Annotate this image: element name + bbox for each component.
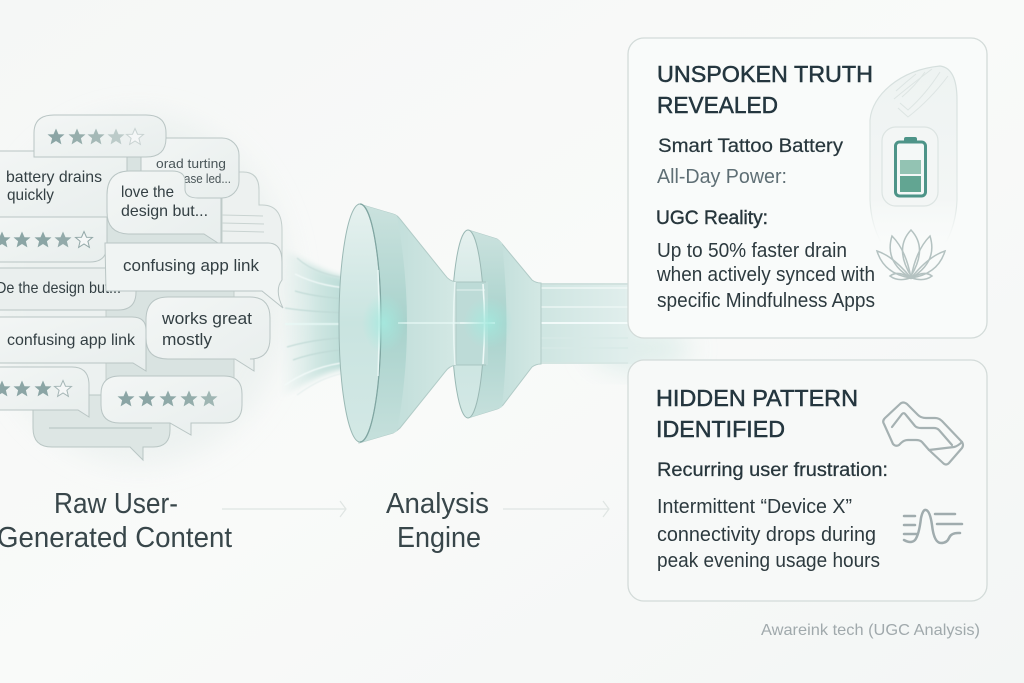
card body text: specific Mindfulness Apps <box>657 290 875 312</box>
icon: second funnel lens <box>452 230 541 418</box>
card heading: UNSPOKEN TRUTH <box>657 61 873 87</box>
card body text <box>657 496 880 572</box>
heading: analysis engine <box>386 488 489 554</box>
bubble: works great mostly <box>146 297 270 371</box>
bubble: works great mostly: mostly <box>162 330 212 349</box>
bubble: blank lined <box>222 172 282 260</box>
output stream to the cards <box>505 283 690 371</box>
bubble: confusing app link left <box>0 317 146 371</box>
icon: signal wave <box>904 510 962 543</box>
card heading <box>657 61 873 118</box>
card subheading: recurring frustration: Recurring user frustration: <box>657 460 888 481</box>
bubble: three stars <box>0 367 89 417</box>
arrow: content to engine <box>222 501 346 517</box>
icon: flexible band <box>883 402 963 464</box>
card body text: when actively synced with <box>656 264 875 286</box>
icon: lotus <box>877 230 945 280</box>
card body text: Intermittent “Device X” <box>657 496 852 518</box>
bubble: confusing app link right: confusing app link <box>123 256 259 275</box>
bubble: three and a half stars <box>0 217 107 262</box>
panel: raw user-generated content bubbles <box>0 115 290 465</box>
footer credit: Awareink tech (UGC Analysis) <box>761 622 980 639</box>
bubble: battery drains quickly: battery drains <box>6 169 102 186</box>
bubble: battery drains quickly: quickly <box>7 187 54 204</box>
bubble: truncated review: ase led... <box>184 171 231 186</box>
card text: all-day power: All-Day Power: <box>657 166 787 188</box>
bubble: confusing app link left: confusing app link <box>7 332 136 349</box>
bubble: truncated review: orad turting <box>156 156 226 171</box>
bubble: battery drains quickly <box>0 151 127 218</box>
bubble: love the design: love the <box>121 184 174 201</box>
bubble: love the design <box>107 171 221 245</box>
card body text: Up to 50% faster drain <box>657 240 847 262</box>
card body text: peak evening usage hours <box>657 550 880 572</box>
heading: analysis engine: Analysis <box>386 488 489 520</box>
bubble: loved the design: De the design but... <box>0 280 121 297</box>
card body text <box>656 240 875 312</box>
card heading: REVEALED <box>657 92 778 118</box>
bubble: truncated review <box>141 138 239 198</box>
heading: raw user-generated content: Raw User- <box>54 488 178 520</box>
icon: smart tattoo device with battery <box>870 66 957 244</box>
icon: first funnel lens and connecting throat <box>339 204 513 443</box>
panel: unspoken truth revealed <box>628 38 987 338</box>
bubble: blank bottom <box>33 395 170 460</box>
bubble: works great mostly: works great <box>161 309 252 328</box>
card body text: connectivity drops during <box>657 524 876 546</box>
card heading: IDENTIFIED <box>656 416 785 442</box>
bubble: four star rating top <box>34 115 166 157</box>
bubble: five stars <box>101 376 242 435</box>
heading: raw user-generated content <box>0 488 232 554</box>
incoming data streams <box>280 250 382 398</box>
arrow: engine to insights <box>503 501 609 517</box>
card heading <box>656 385 858 442</box>
panel: hidden pattern identified <box>628 360 987 601</box>
card heading: HIDDEN PATTERN <box>656 385 858 411</box>
bubble: love the design: design but... <box>121 203 208 220</box>
bubble: loved the design <box>0 268 136 310</box>
card subheading: UGC reality: UGC Reality: <box>656 208 768 229</box>
heading: raw user-generated content: Generated Content <box>0 522 232 554</box>
bubble: confusing app link right <box>105 243 283 308</box>
heading: analysis engine: Engine <box>397 522 481 554</box>
card subheading: smart tattoo battery: Smart Tattoo Battery <box>658 136 844 157</box>
